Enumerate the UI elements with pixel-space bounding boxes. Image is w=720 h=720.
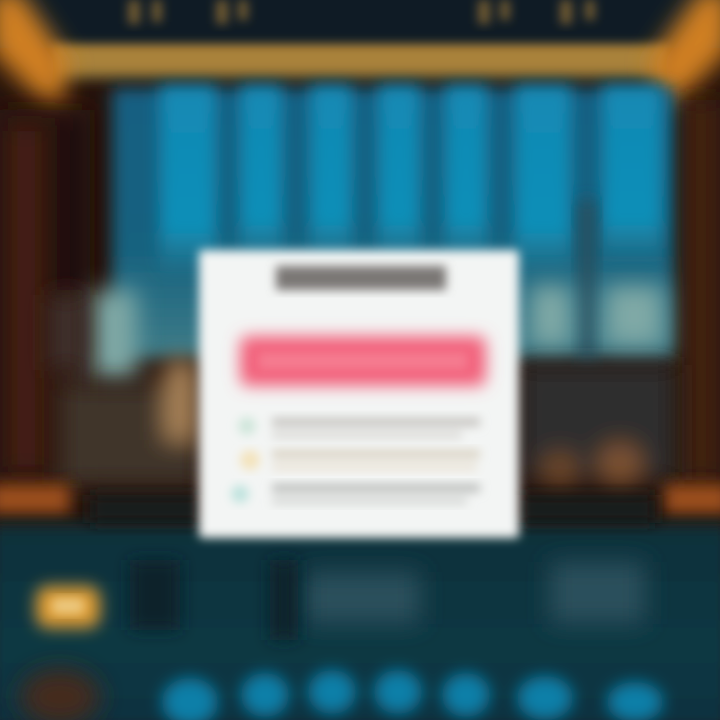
panoramic window with blue stripes	[112, 86, 674, 360]
list row 3	[231, 484, 480, 504]
blue floor lights	[162, 670, 663, 720]
wood side walls	[0, 100, 720, 480]
orange floor glow	[0, 484, 720, 514]
gold ceiling beam	[50, 44, 670, 82]
ceiling	[0, 0, 720, 48]
city and interior mid-ground	[50, 295, 675, 488]
teal lower counter	[0, 495, 720, 720]
orange lamp icon	[20, 586, 100, 720]
pale lower window panes	[92, 285, 664, 380]
list row 1	[238, 417, 480, 438]
notice card	[199, 250, 519, 538]
glowing corner beams	[0, 0, 720, 110]
red banner	[240, 336, 486, 386]
card panel	[199, 250, 519, 538]
card heading	[276, 266, 446, 290]
list row 2	[240, 450, 480, 470]
